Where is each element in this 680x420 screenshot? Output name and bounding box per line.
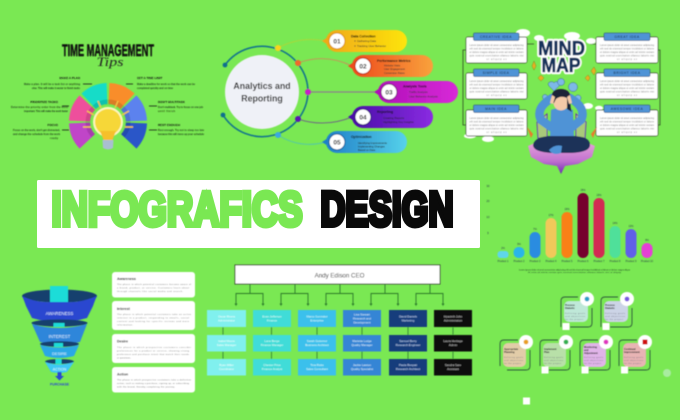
wheel inner shade bbox=[88, 102, 128, 136]
column 6: Hyacinth John bbox=[444, 314, 463, 318]
funnel desire bbox=[40, 341, 79, 358]
label descriptions: because this will mess up your schedule bbox=[158, 133, 205, 136]
labels left and right bbox=[30, 76, 186, 127]
step 05: Optimization bbox=[351, 135, 372, 139]
center circle bbox=[225, 55, 299, 129]
idea box copy: Lorem ipsum dolor sit amet consectetur adipiscing bbox=[600, 44, 655, 47]
step 03: 03 bbox=[385, 90, 393, 96]
banner bbox=[37, 180, 480, 248]
step copy: for the project bbox=[504, 362, 521, 365]
label descriptions: else. This will make it easier to finish tasks bbox=[32, 87, 81, 90]
ring arcs bbox=[223, 46, 308, 137]
label descriptions: Focus on the work, don't get distracted, bbox=[13, 129, 60, 132]
step copy: for the project bbox=[544, 362, 561, 365]
step icon badges bbox=[519, 292, 652, 349]
step copy: and objectives bbox=[544, 359, 563, 362]
idea box copy: Lorem ipsum dolor sit amet consectetur adipiscing bbox=[470, 117, 524, 120]
idea header labels: GREAT IDEA bbox=[614, 35, 640, 39]
step copy: Defining goals bbox=[565, 313, 585, 315]
step titles: Diabetic bbox=[605, 307, 615, 310]
labels left and right: SET A TIME LIMIT bbox=[137, 76, 162, 80]
step 03: Analysis Tools bbox=[403, 84, 427, 88]
label descriptions: until finish bbox=[158, 110, 175, 113]
panel: organisation chart bbox=[207, 265, 472, 376]
bar value labels: 25% bbox=[581, 189, 586, 192]
step 01: Tracking User Behavior bbox=[357, 44, 386, 48]
idea box copy: quis nostrud exercitation ullamco laboris nisi bbox=[470, 54, 524, 58]
idea boxes bbox=[466, 37, 658, 136]
column 1: Isabel Moore bbox=[218, 339, 235, 343]
label descriptions: Make a deadline for work so that the work can be bbox=[137, 83, 196, 86]
idea box copy: et dolore magna aliqua ut enim ad minim veniam bbox=[600, 51, 654, 54]
funnel action: ACTION bbox=[53, 368, 67, 372]
step titles: Process bbox=[605, 304, 615, 307]
idea box copy: et dolore magna aliqua ut enim ad minim veniam bbox=[470, 87, 524, 90]
column 3 bbox=[298, 310, 336, 376]
step icons bbox=[524, 297, 648, 344]
card: interest: information. bbox=[117, 324, 133, 326]
column 3: Tina Ricks bbox=[310, 363, 324, 367]
funnel desire: DESIRE bbox=[52, 351, 67, 356]
step copy: Defining goals bbox=[544, 357, 563, 359]
column 5: Marketing bbox=[402, 318, 415, 322]
idea box copy: quis nostrud exercitation ullamco laboris nisi bbox=[600, 54, 654, 58]
banner panel bbox=[37, 180, 480, 248]
step 03: Traffic Analysis bbox=[409, 90, 428, 94]
step titles: Adjustment bbox=[584, 352, 598, 355]
card: action: with the brand, thereby completing the journey. bbox=[117, 386, 175, 388]
column 1: Administrator bbox=[218, 318, 235, 322]
column 6: Sandra Sare bbox=[445, 363, 462, 367]
label descriptions: and change the schedule from the work bbox=[13, 133, 61, 136]
column 1 bbox=[207, 310, 246, 376]
idea box copy: Lorem ipsum dolor sit amet consectetur adipiscing bbox=[470, 80, 524, 83]
card: interest: interest in a product, responding to emails, social bbox=[117, 316, 189, 320]
step copy: and objectives bbox=[565, 315, 585, 318]
idea box copy: ut aliquip ex bbox=[486, 58, 507, 61]
bar category labels: Product 4 bbox=[546, 260, 557, 263]
column 3: Sarah Gutierrez bbox=[307, 339, 328, 343]
label descriptions: Determine the priority order from the most bbox=[11, 106, 68, 109]
column 4: Quality Specialist bbox=[351, 367, 373, 371]
step 02: 02 bbox=[359, 64, 367, 70]
step titles: Plan bbox=[544, 351, 550, 354]
bar value labels: 17% bbox=[549, 214, 554, 217]
panel: analytics and reporting bbox=[221, 30, 458, 153]
card: interest: The phase in which potential customers take an active bbox=[117, 313, 192, 316]
bar value labels: 13% bbox=[629, 225, 634, 228]
idea header labels: MAIN IDEA bbox=[485, 107, 507, 111]
column 1: Oscar Rivera bbox=[218, 314, 235, 318]
bar category labels: Product 5 bbox=[562, 260, 573, 263]
column 5 bbox=[389, 310, 427, 376]
chart footnote bbox=[519, 268, 631, 274]
step titles: Process bbox=[565, 304, 575, 307]
card: action: Action bbox=[117, 372, 128, 376]
idea box copy: et dolore magna aliqua ut enim ad minim veniam bbox=[470, 124, 524, 127]
idea box copy: Lorem ipsum dolor sit amet consectetur adipiscing bbox=[470, 44, 524, 47]
ring dots bbox=[221, 45, 311, 138]
bar category labels: Product 6 bbox=[578, 260, 589, 263]
org connectors bbox=[236, 284, 443, 304]
card: awareness: through channels like social media and search. bbox=[117, 290, 183, 293]
card: awareness: The phase in which potential customers become aware of bbox=[117, 283, 191, 286]
step 02 bbox=[348, 55, 433, 77]
panel: process steps bbox=[500, 292, 671, 404]
step titles: Appropriate bbox=[504, 348, 519, 351]
idea box copy: quis nostrud exercitation ullamco laboris nisi bbox=[470, 90, 524, 94]
step 05 bbox=[322, 131, 407, 153]
label descriptions bbox=[11, 83, 205, 140]
idea header labels: AWESOME IDEA bbox=[611, 107, 643, 111]
bar value labels: 19% bbox=[565, 208, 570, 211]
column 6: Admin bbox=[449, 343, 457, 347]
step copy: and objectives bbox=[504, 359, 523, 362]
step 05: Implementing Changes bbox=[358, 144, 385, 148]
card: interest: Interest bbox=[117, 307, 131, 311]
bar category labels: Product 2 bbox=[514, 260, 525, 263]
funnel interest: INTEREST bbox=[49, 334, 71, 339]
panel: marketing funnel bbox=[22, 272, 195, 392]
step copy: for the project bbox=[584, 362, 601, 365]
idea box copy: quis nostrud exercitation ullamco laboris nisi bbox=[600, 90, 654, 94]
column 4 bbox=[343, 310, 381, 376]
idea header labels: CREATIVE IDEA bbox=[480, 35, 512, 39]
label descriptions: Rest enough. Try not to sleep too late bbox=[158, 129, 205, 132]
bar category labels: Product 1 bbox=[498, 260, 509, 263]
bar value labels bbox=[501, 189, 650, 250]
heading: mind map: MIND bbox=[538, 38, 585, 60]
idea box copy: Lorem ipsum dolor sit amet consectetur adipiscing bbox=[600, 117, 655, 120]
step copy: Defining goals bbox=[605, 313, 625, 315]
column 4: Development bbox=[353, 320, 371, 324]
card: desire: preferences for a product or service, showing strong bbox=[117, 350, 190, 352]
bar value labels: 7% bbox=[533, 228, 538, 231]
column 1: Sales Manager bbox=[217, 343, 236, 347]
card: desire: The phase in which prospective customers consider bbox=[117, 346, 191, 349]
step titles: Diabetic bbox=[565, 307, 575, 310]
column 4: Jackie Lawton bbox=[353, 363, 372, 367]
step 01: Data Collection bbox=[351, 34, 376, 38]
bar chart bbox=[487, 184, 654, 274]
column 6: Assistant bbox=[447, 367, 459, 371]
chart footnote: Lorem ipsum dolor sit amet consectetur adipiscing elit sed do eiusmod tempor incididunt ut labore et dolore magna aliqua bbox=[519, 268, 631, 272]
labels left and right: REST ENOUGH bbox=[158, 123, 180, 127]
bar category labels: Product 9 bbox=[626, 260, 637, 263]
idea box copy: ut aliquip ex bbox=[486, 94, 507, 97]
bar value labels: 2% bbox=[501, 247, 506, 250]
card: desire: or questions. bbox=[117, 356, 131, 360]
bar category labels: Product 10 bbox=[641, 260, 654, 263]
funnel interest bbox=[32, 319, 88, 344]
step titles: Continual bbox=[624, 348, 636, 351]
faint dot bbox=[663, 369, 671, 377]
idea box copy: quis nostrud exercitation ullamco laboris nisi bbox=[470, 128, 524, 130]
arrows bbox=[62, 84, 157, 130]
column 3: Business Architect bbox=[305, 343, 329, 347]
funnel action bbox=[45, 359, 74, 373]
idea box copy: ut aliquip ex bbox=[617, 131, 638, 134]
heading: mind map: MIND bbox=[538, 38, 585, 60]
connector vines bbox=[463, 44, 660, 125]
org arrowheads bbox=[234, 304, 444, 306]
bar category labels bbox=[498, 260, 654, 263]
step 04: 04 bbox=[359, 114, 367, 122]
step 02: Performance Metrics bbox=[377, 59, 411, 63]
step 02: Conversion Rates bbox=[384, 71, 405, 75]
idea box copy: elit sed do eiusmod tempor incididunt ut labore bbox=[600, 84, 655, 86]
floating icons bbox=[542, 78, 581, 101]
column 3: Marco Gonzalez bbox=[306, 314, 328, 318]
funnel awareness: AWARENESS bbox=[46, 311, 73, 316]
panel: time management tips bbox=[11, 41, 205, 150]
column 2: Chester Price bbox=[263, 363, 281, 367]
column 3: Enterprise bbox=[310, 318, 324, 322]
step titles: Monitoring bbox=[584, 346, 597, 349]
ceo box bbox=[235, 265, 440, 284]
arrow down bbox=[55, 372, 64, 380]
wheel segments bbox=[80, 94, 136, 141]
column 5: Paula Respati bbox=[399, 363, 417, 367]
y axis labels: 10 bbox=[487, 215, 490, 219]
column 3: Sales Consultant bbox=[306, 367, 328, 371]
heading: time management: TIME MANAGEMENT bbox=[62, 41, 154, 60]
heading: mind map: MAP bbox=[542, 55, 580, 77]
step 05: 05 bbox=[333, 140, 341, 146]
idea box copy: ut aliquip ex bbox=[486, 131, 507, 134]
column 2: Finance bbox=[267, 318, 278, 322]
idea box copy: elit sed do eiusmod tempor incididunt ut labore bbox=[470, 120, 524, 124]
column 4: Marietta Lodge bbox=[352, 339, 372, 343]
column 5: David Daniels bbox=[399, 314, 417, 318]
y axis labels: 5 bbox=[487, 231, 489, 235]
idea box copy: et dolore magna aliqua ut enim ad minim veniam bbox=[600, 124, 654, 127]
step 01: 01 bbox=[333, 38, 341, 46]
bar category labels: Product 3 bbox=[530, 260, 541, 263]
label descriptions: Make a plan. It will be a task list or anything bbox=[24, 83, 80, 86]
sparkles bbox=[532, 61, 596, 81]
idea box copy: ut aliquip ex bbox=[617, 94, 638, 97]
card: action: action, such as making a purchase, signing up, or subscribing bbox=[117, 382, 190, 385]
label descriptions: completed quickly and on time bbox=[137, 87, 174, 90]
step copy: and objectives bbox=[584, 359, 603, 362]
step frames bbox=[500, 297, 650, 370]
idea header labels bbox=[480, 35, 643, 111]
step 04: Highlighting Key Insights bbox=[383, 120, 414, 124]
column 1: Ryan Miller bbox=[219, 363, 234, 367]
idea header labels: BRIGHT IDEA bbox=[613, 71, 641, 75]
bar value labels: 5% bbox=[517, 243, 522, 246]
bars bbox=[498, 193, 652, 258]
idea box copy: elit sed do eiusmod tempor incididunt ut labore bbox=[600, 48, 655, 50]
step titles: Implement bbox=[544, 348, 557, 351]
idea box copy: et dolore magna aliqua ut enim ad minim veniam bbox=[470, 51, 524, 54]
column 5: Samuel Berry bbox=[399, 339, 417, 343]
column 2: Finance Manager bbox=[261, 343, 283, 347]
idea box copy: elit sed do eiusmod tempor incididunt ut labore bbox=[470, 48, 524, 50]
step copy: Defining goals bbox=[504, 357, 523, 359]
step 04: Reporting bbox=[377, 110, 393, 114]
card: awareness bbox=[117, 277, 191, 293]
idea box copy: et dolore magna aliqua ut enim ad minim veniam bbox=[600, 87, 654, 90]
column 2: Evan Jefferson bbox=[262, 314, 282, 318]
column 4: Research and bbox=[353, 316, 371, 320]
center title: Reporting bbox=[241, 94, 283, 104]
step 01: Gathering Data bbox=[357, 39, 376, 43]
label descriptions: Don't multitask. Try to focus on one job bbox=[158, 106, 203, 109]
column 5: Research Engineer bbox=[396, 343, 420, 347]
bar category labels: Product 8 bbox=[610, 260, 621, 263]
step copy: for the project bbox=[565, 318, 583, 321]
column 4: Lisa Stewart bbox=[354, 312, 370, 316]
card: action: The phase in which prospective customers take a definitive bbox=[117, 378, 192, 382]
card: awareness: Awareness bbox=[117, 277, 136, 281]
heading: mind map bbox=[538, 38, 585, 77]
idea box copy: ut aliquip ex bbox=[617, 58, 638, 61]
banner title: INFOGRAFICS bbox=[52, 184, 302, 236]
column 6: Laura Heritage bbox=[443, 339, 463, 343]
idea box copy bbox=[470, 44, 655, 134]
step 03: User Behavior Analysis bbox=[409, 94, 438, 98]
step copy: and objectives bbox=[605, 315, 625, 318]
step copy: for the project bbox=[624, 362, 641, 365]
white corner squares bbox=[523, 323, 628, 404]
column 2: Finance Analyst bbox=[262, 367, 282, 371]
column 2: Lane Berge bbox=[265, 339, 280, 343]
card: interest: content and looking for specific reviews and more bbox=[117, 320, 190, 323]
step titles bbox=[504, 304, 640, 355]
column links bbox=[223, 327, 453, 359]
labels left and right: DON'T MULTITASK bbox=[158, 100, 186, 104]
column 4: Quality Manager bbox=[351, 343, 373, 347]
card: desire: preference and purchase intent that match their needs bbox=[117, 353, 190, 356]
bar category labels: Product 7 bbox=[594, 260, 605, 263]
icon: light bulb bbox=[83, 101, 133, 150]
idea box copy: quis nostrud exercitation ullamco laboris nisi bbox=[600, 128, 654, 130]
step titles: Improvement bbox=[624, 351, 640, 354]
step 02: Website Visits bbox=[384, 64, 401, 68]
character seated on brain bbox=[527, 89, 597, 174]
labels left and right: MAKE A PLAN bbox=[59, 76, 80, 80]
card: desire: Desire bbox=[117, 340, 128, 344]
step copy: and objectives bbox=[624, 359, 643, 362]
stage cards bbox=[112, 272, 195, 392]
column 1: Coordinator bbox=[219, 367, 234, 371]
connector lines bbox=[278, 40, 378, 144]
label descriptions: important. This will make the work faster bbox=[24, 110, 68, 113]
idea box copy: elit sed do eiusmod tempor incididunt ut labore bbox=[470, 84, 524, 86]
funnel awareness bbox=[22, 286, 97, 322]
y axis labels: 20 bbox=[487, 199, 490, 203]
banner title: DESIGN bbox=[320, 184, 454, 236]
step copy: Defining goals bbox=[624, 357, 643, 359]
step copy bbox=[504, 313, 643, 365]
idea box copy: Lorem ipsum dolor sit amet consectetur adipiscing bbox=[600, 80, 655, 83]
label descriptions: ready bbox=[50, 137, 59, 140]
step 01 bbox=[322, 30, 407, 52]
step 04 bbox=[348, 106, 433, 128]
labels left and right: FOCUS bbox=[48, 123, 58, 127]
ceo box: Andy Edison CEO bbox=[315, 272, 365, 280]
heading: mind map: MAP bbox=[542, 55, 580, 77]
column 6: Administration bbox=[444, 318, 463, 322]
step 05: Identifying Improvements bbox=[358, 141, 388, 145]
idea header tabs bbox=[474, 33, 650, 112]
bar value labels: 23% bbox=[597, 194, 602, 197]
y axis labels: 30 bbox=[487, 184, 490, 188]
step cards bbox=[503, 301, 646, 367]
step 02: User Engagement bbox=[384, 67, 405, 71]
bar value labels: 14% bbox=[613, 222, 618, 225]
card: interest bbox=[117, 307, 192, 326]
idea box copy: elit sed do eiusmod tempor incididunt ut labore bbox=[600, 120, 655, 124]
step titles: and bbox=[584, 349, 589, 352]
chart footnote: Ut enim ad minim veniam quis nostrud exercitation ullamco laboris nisi ut aliquip bbox=[528, 271, 622, 274]
step 03 bbox=[374, 81, 458, 103]
column 6 bbox=[434, 310, 472, 376]
y axis labels bbox=[487, 184, 490, 235]
center title: Analytics and bbox=[233, 81, 291, 91]
card: desire bbox=[117, 340, 191, 360]
clouds bbox=[464, 29, 603, 142]
idea header labels: SIMPLE IDEA bbox=[483, 71, 510, 75]
card: awareness: a brand, product, or service. Customers learn about bbox=[117, 286, 189, 290]
labels left and right: PRIORITIZE TASKS bbox=[30, 100, 58, 104]
column 2 bbox=[253, 310, 291, 376]
panel: mind map bbox=[463, 29, 660, 174]
bar value labels: 8% bbox=[645, 239, 650, 242]
card: action bbox=[117, 372, 192, 388]
step copy: Defining goals bbox=[584, 357, 603, 359]
column 5: Research Architect bbox=[396, 367, 420, 371]
purchase label: PURCHASE bbox=[50, 382, 70, 386]
heading: tips script: Tips bbox=[96, 54, 124, 69]
step 04: Creating Reports bbox=[383, 116, 405, 120]
step 05: Based on Data bbox=[358, 148, 376, 152]
step titles: Planning bbox=[504, 351, 515, 354]
step copy: for the project bbox=[605, 318, 623, 321]
